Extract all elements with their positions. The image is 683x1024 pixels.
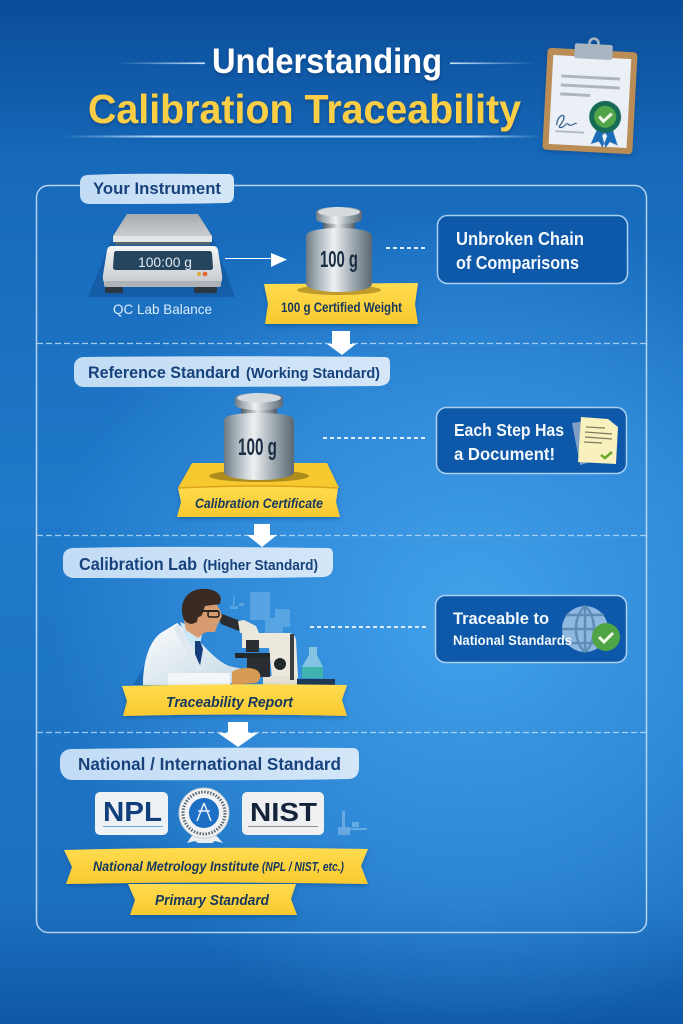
section 3: calibration lab [63,547,626,716]
microscope [218,614,335,685]
title line two: Calibration Traceability [88,86,521,132]
ribbon: national metrology institute: (NPL / NIST, etc.) [262,860,344,874]
arrow: balance to weight [225,253,287,267]
callout: each step has a document [436,408,626,474]
dashed connector [323,437,428,439]
ribbon: certified weight: 100 g Certified Weight [281,300,402,315]
section 4: national / international standard [60,748,368,915]
section 2: reference standard [74,356,626,517]
heading pill: calibration lab [63,547,333,578]
callout: traceable to national standards: Traceable to [453,609,549,628]
arrow: down to reference standard [327,331,356,355]
heading pill: national standard [60,748,359,780]
heading pill: reference standard [74,356,390,387]
certificate plinth ribbon [177,463,340,517]
callout: traceable to national standards [436,596,626,662]
arrow: down to calibration lab [247,524,277,547]
icon: document [572,417,618,465]
icon: 100 g certified weight: 100 g [320,246,358,272]
callout: unbroken chain [438,216,628,284]
callout: each step has a document: Each Step Has [454,420,564,440]
ribbon: primary standard: Primary Standard [155,893,270,909]
logo card: NPL [95,792,168,835]
balance display reading: 100:00 g [138,254,192,270]
heading pill: your instrument [80,174,234,204]
icon: faded instrument [338,811,367,835]
certificate label: Calibration Certificate [195,496,323,511]
icon: flask [302,647,323,678]
scientist at microscope [133,589,335,685]
heading pill: national standard: National / International Standard [78,754,341,774]
title [62,42,542,138]
section dividers [37,344,646,732]
lab coat [143,623,243,685]
logo card: NPL: NPL [103,796,162,827]
ribbon: national metrology institute [64,848,368,884]
seal emblem [179,788,229,843]
head [184,600,222,638]
icon: clipboard with award ribbon [542,36,638,154]
balance caption: QC Lab Balance [113,301,212,317]
icon: 100 g certified weight [297,207,381,295]
ribbon: certified weight [264,283,418,324]
heading pill: calibration lab: Calibration Lab [79,554,197,574]
heading pill: reference standard: (Working Standard) [246,366,380,382]
callout: each step has a document: a Document! [454,444,555,464]
section 1: your instrument [80,174,628,324]
heading pill: reference standard: Reference Standard [88,363,240,382]
title line one: Understanding [212,42,442,81]
logo card: NIST [242,792,324,835]
logo card: NIST: NIST [250,797,317,827]
dashed connector [310,626,428,628]
arrow: down to national standard [218,722,258,747]
icon: globe with check [562,606,620,652]
callout: unbroken chain: Unbroken Chain [456,229,584,249]
main panel frame [36,186,646,932]
icon: reference weight [209,393,309,482]
ribbon: national metrology institute: National Metrology Institute [93,858,259,874]
icon: faded lab equipment [230,592,290,633]
icon: reference weight: 100 g [238,434,277,461]
ribbon: traceability report [122,684,347,716]
callout: unbroken chain: of Comparisons [456,253,579,273]
heading pill: your instrument: Your Instrument [93,180,222,198]
ribbon: primary standard [128,884,297,915]
dashed connector [386,247,428,249]
ribbon: traceability report: Traceability Report [166,695,294,711]
icon: lab balance [88,214,235,297]
callout: traceable to national standards: National Standards [453,632,572,648]
heading pill: calibration lab: (Higher Standard) [203,558,318,574]
